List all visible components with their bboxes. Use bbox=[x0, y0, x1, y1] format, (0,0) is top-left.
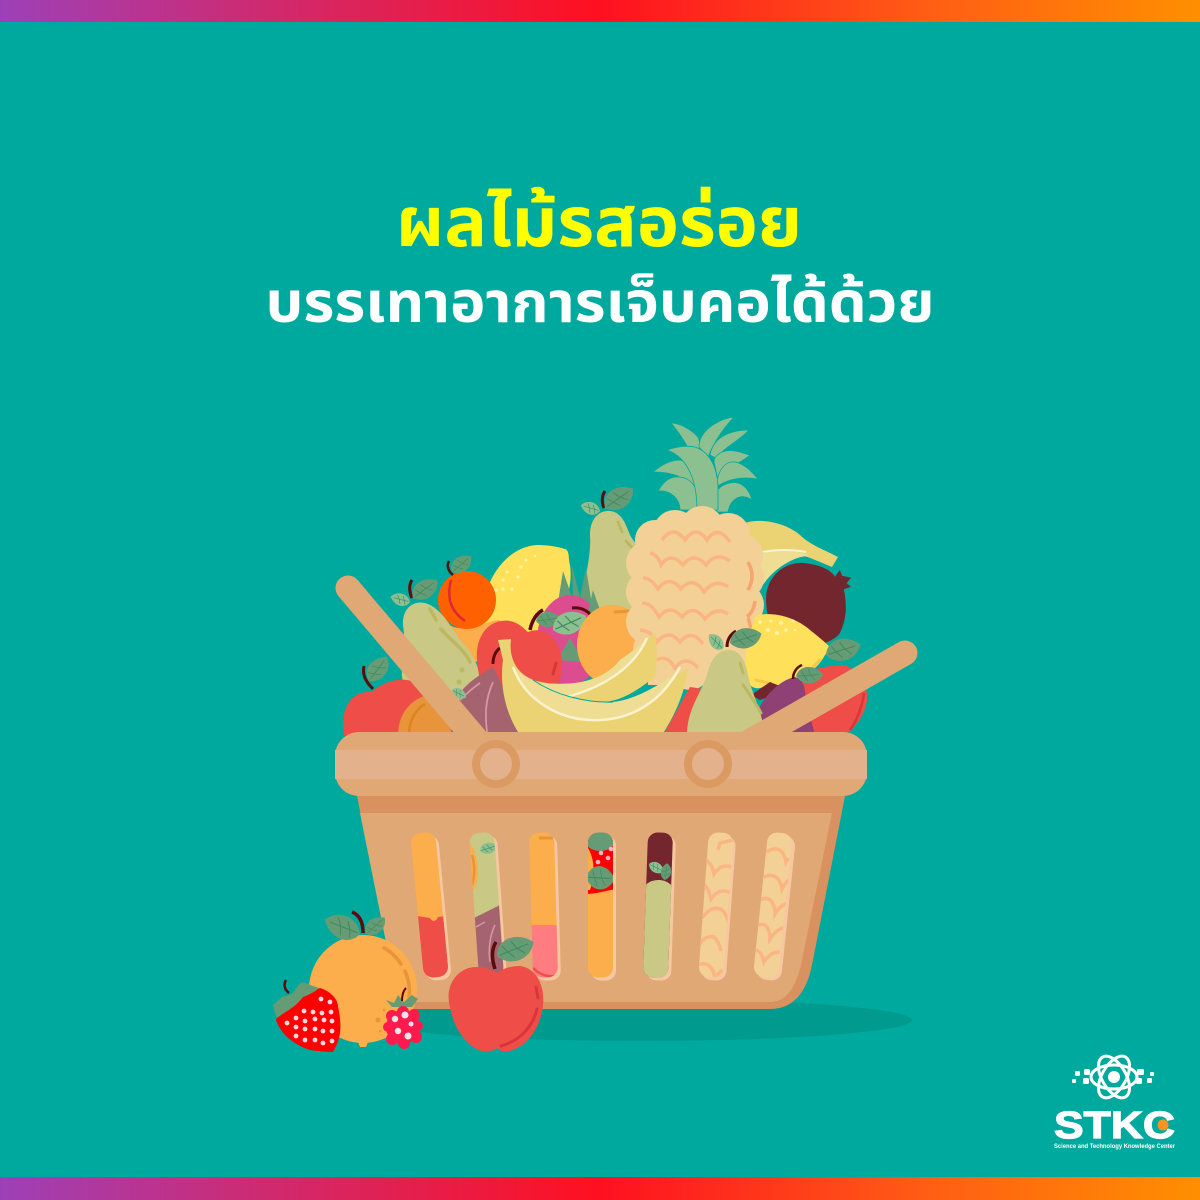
red apple, centre bbox=[477, 621, 562, 700]
slot 4: strawberry and orange bbox=[588, 832, 613, 978]
pineapple body bbox=[626, 506, 764, 690]
basket shadow bbox=[368, 999, 912, 1041]
back banana bbox=[745, 521, 838, 590]
slot rim highlights bbox=[413, 835, 796, 981]
orange, centre bbox=[577, 605, 647, 685]
yellow lemon, left bbox=[480, 545, 571, 650]
basket rim bbox=[335, 732, 867, 796]
front bananas bbox=[498, 633, 688, 735]
strawberry bbox=[273, 980, 340, 1052]
left handle bbox=[348, 588, 475, 738]
red apple, left bbox=[343, 652, 440, 735]
title: yellow headline: ผลไม้รสอร่อย bbox=[396, 184, 802, 261]
logo: tagline: Science and Technology Knowledge Center bbox=[1054, 1144, 1176, 1150]
plum bbox=[751, 665, 823, 735]
slot 3: orange and pink bbox=[529, 832, 558, 978]
slot 6: pineapple bbox=[699, 832, 733, 978]
logo: atom mark bbox=[1072, 1051, 1154, 1103]
peach with leaf bbox=[438, 550, 496, 629]
fruit pile inside the basket bbox=[343, 417, 867, 735]
rim ring, left bbox=[476, 744, 516, 784]
logo: wordmark: STKC bbox=[1054, 1105, 1175, 1147]
red apple, right bbox=[663, 635, 867, 735]
orange peach behind bbox=[441, 618, 500, 665]
right handle bbox=[735, 653, 905, 750]
upper banana bbox=[533, 633, 657, 702]
basket bbox=[335, 588, 905, 1009]
loose fruit in front bbox=[273, 908, 543, 1052]
slot 5: pomegranate and pear bbox=[643, 832, 673, 978]
apricot bbox=[398, 696, 452, 735]
raspberry bbox=[383, 988, 423, 1049]
title: white subheading: บรรเทาอาการเจ็บคอได้ด้วย bbox=[266, 271, 934, 335]
lower banana bbox=[498, 639, 688, 735]
pineapple crown bbox=[653, 417, 758, 512]
red apple, front bbox=[449, 931, 543, 1051]
pear, top bbox=[579, 480, 650, 620]
dragon fruit bbox=[530, 565, 603, 685]
pear, front bbox=[687, 624, 765, 735]
yellow lemon, right bbox=[745, 614, 831, 688]
slot 7: pineapple bbox=[754, 832, 792, 977]
fig bbox=[450, 667, 530, 735]
rim ring, right bbox=[688, 744, 728, 784]
tilted pear, left bbox=[389, 573, 480, 715]
pineapple bbox=[626, 417, 764, 690]
basket body bbox=[357, 796, 845, 1009]
pineapple pattern bbox=[640, 532, 755, 668]
orange, front bbox=[309, 908, 417, 1047]
slot 1: orange and apple bbox=[411, 832, 448, 978]
logo: STKC bbox=[1054, 1051, 1176, 1150]
logo: orange dot bbox=[1158, 1120, 1168, 1130]
bottom gradient bar bbox=[0, 1177, 1200, 1200]
slot 2: pear and fig bbox=[470, 832, 504, 973]
pomegranate bbox=[765, 562, 853, 650]
top gradient bar bbox=[0, 0, 1200, 22]
